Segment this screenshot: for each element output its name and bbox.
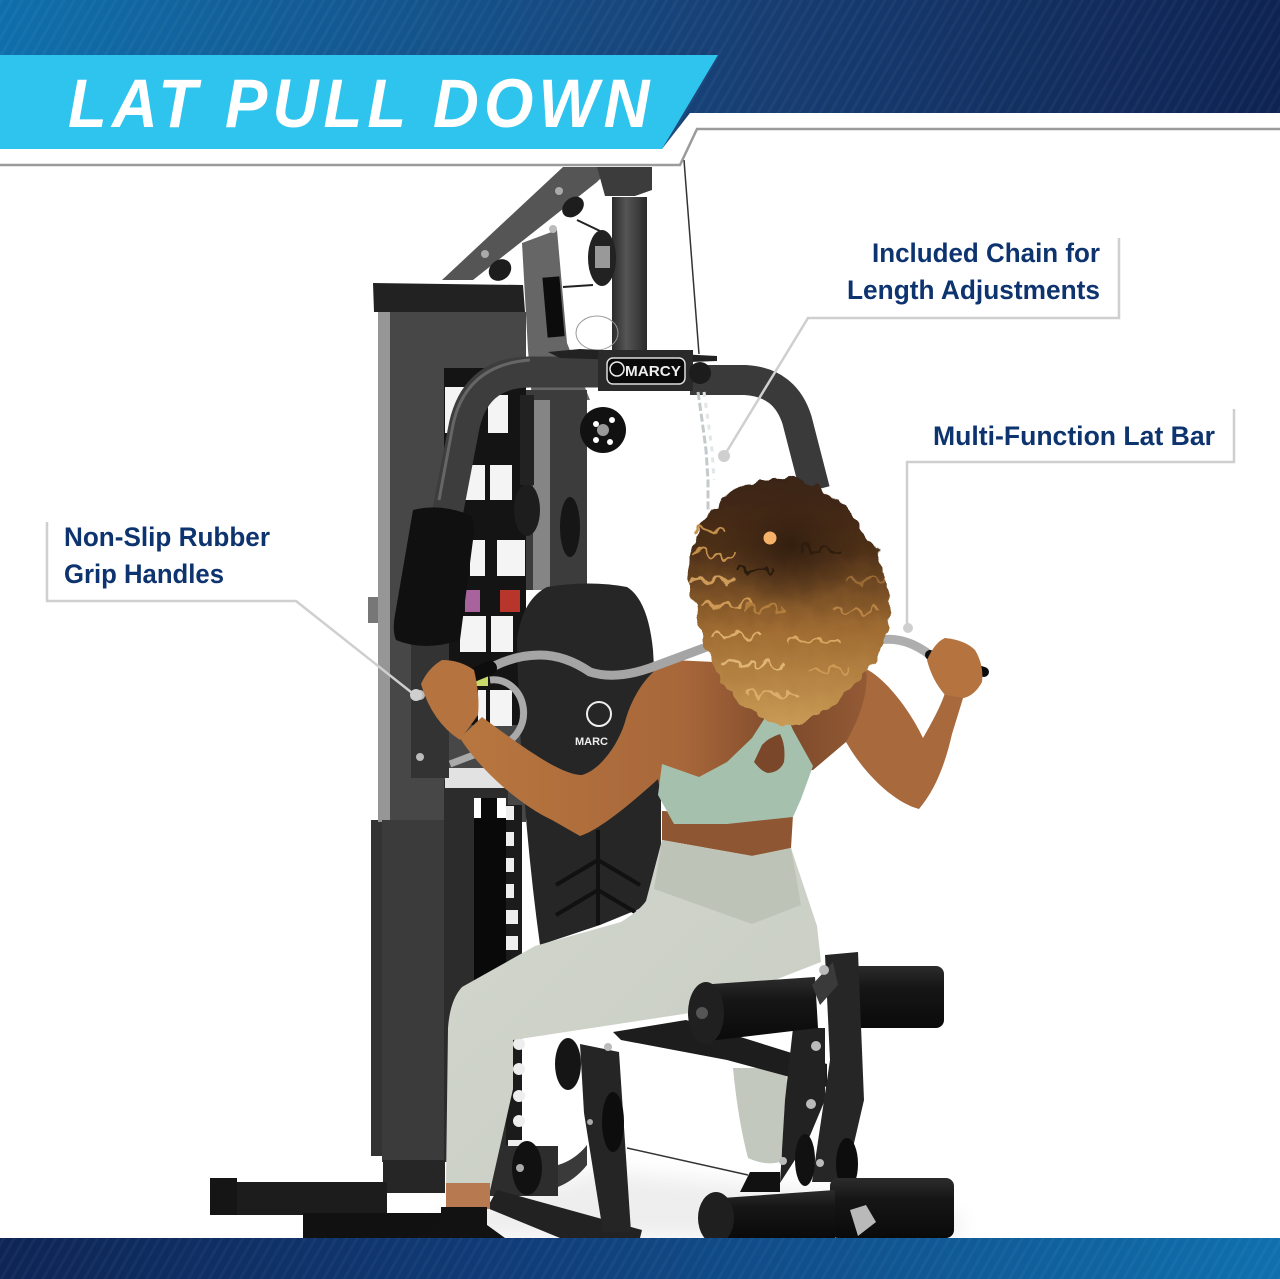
seat bar (613, 1020, 827, 1087)
lower rollers (830, 1178, 954, 1238)
marcy badge: MARCY (625, 363, 681, 380)
seat back pad (517, 584, 661, 945)
gym machine (210, 160, 815, 1238)
callout: non-slip grip handles: Non-Slip Rubber (64, 522, 270, 552)
far leg (733, 1068, 787, 1163)
callout: multi-function lat bar (903, 409, 1234, 633)
left hand (421, 660, 478, 740)
lat bar (473, 639, 984, 675)
lower front roller (698, 1190, 835, 1244)
orange marker on hair (764, 532, 776, 544)
column foot (487, 1141, 642, 1238)
bottom pulley right (836, 1138, 858, 1190)
sock and shoe (415, 1207, 505, 1238)
ring wire (576, 316, 618, 350)
silver ring (450, 680, 524, 764)
pulley bracket (595, 246, 610, 268)
right arm (830, 660, 964, 809)
tower (368, 283, 526, 1193)
cable (684, 160, 699, 354)
callout: included chain: Length Adjustments (847, 275, 1100, 305)
callout: non-slip grip handles: Grip Handles (64, 559, 224, 589)
top plate (548, 349, 717, 362)
leggings (446, 840, 821, 1191)
waistband (654, 840, 801, 924)
woman figure (415, 660, 964, 1238)
brace (812, 962, 838, 1005)
shoulder pad (394, 507, 474, 646)
header band (0, 0, 1280, 165)
right hand (927, 638, 982, 698)
bench and leg rollers (613, 952, 954, 1244)
side plate stack (371, 820, 383, 1156)
hair (690, 478, 890, 725)
callout: non-slip grip handles (47, 522, 422, 701)
lower white panel (445, 768, 505, 788)
title banner: LAT PULL DOWN (68, 66, 651, 143)
marcy logo (587, 702, 611, 726)
callout: included chain (718, 238, 1119, 462)
front upper roller (688, 977, 818, 1044)
rear post (780, 1028, 825, 1183)
chain (698, 392, 714, 512)
ankle (446, 1183, 490, 1209)
cables near top pulley (563, 220, 600, 287)
back and left arm (460, 660, 867, 836)
floor shadow (440, 1170, 960, 1238)
mid pulleys (514, 395, 626, 557)
knob (689, 362, 711, 384)
bottom pulleys (795, 1134, 815, 1186)
marcy badge (607, 358, 685, 384)
weight stack (474, 798, 525, 1153)
upper frame arm (442, 167, 652, 400)
midriff (662, 811, 793, 856)
arch bar (439, 360, 815, 510)
sports bra (658, 700, 813, 824)
footer band (0, 1238, 1280, 1279)
pulley top (588, 230, 616, 286)
marcy plate (598, 350, 693, 391)
bench uprights (555, 1038, 748, 1232)
callout: multi-function lat bar: Multi-Function Lat Bar (933, 421, 1215, 451)
wing nut (850, 1205, 876, 1236)
left foot beam (210, 1178, 443, 1238)
rear upper roller (850, 966, 944, 1028)
far shoe (740, 1172, 780, 1192)
front post (812, 952, 864, 1182)
callout: included chain: Included Chain for (872, 238, 1100, 268)
title banner (0, 55, 718, 149)
bolts (779, 965, 829, 1167)
rear column (526, 390, 587, 590)
instruction poster (444, 368, 526, 726)
small wheels under arm (484, 192, 588, 285)
marcy wordmark: MARC (575, 736, 608, 748)
grip column (411, 640, 449, 778)
